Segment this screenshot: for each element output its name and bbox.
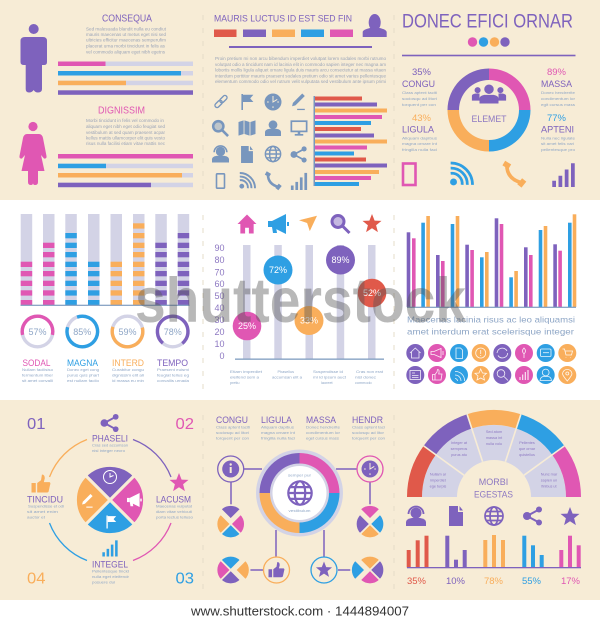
bubble: 52%: 52% [363, 288, 381, 298]
panel: bottom band background [0, 400, 600, 600]
percent labels: 10% [446, 576, 465, 586]
sector texts: quistellus [519, 453, 535, 457]
text block: dignissim description: kellus mattis ullamcorper elit quis vesto [86, 136, 166, 140]
bubble: 33% [294, 306, 324, 335]
y axis labels: 0 [219, 351, 224, 361]
sector texts: massa int [486, 436, 503, 440]
label: phaseli [92, 434, 128, 453]
text block: maecenas: Maecenas lacinia risus ac leo aliquamsi [407, 314, 575, 324]
mini pie: bottom left [217, 556, 250, 584]
y axis labels: 10 [214, 339, 224, 349]
decorative dots [468, 37, 510, 47]
icon: magnifier [332, 216, 350, 233]
captions: Suspendisse id [313, 370, 343, 374]
heading: dignissim: DIGNISSIM [98, 106, 145, 116]
stat: congu: 35% [412, 67, 431, 77]
gauge: 59%: 59% [118, 327, 137, 337]
captions: mi id ipsum auct [313, 376, 347, 380]
label: tincidu: sit amet enim [27, 510, 58, 514]
stat: congu: CONGU [402, 79, 435, 90]
y axis labels [214, 243, 224, 361]
bubble: 33%: 33% [300, 316, 318, 326]
label: lacusm [156, 494, 193, 520]
icon: house [238, 214, 256, 234]
bar chart: dignissim [58, 154, 193, 187]
segments: pink [21, 243, 54, 305]
label: congu [216, 415, 250, 440]
arc: bottom right [133, 523, 171, 560]
label: hendr: sociosqu ad litor [352, 431, 385, 435]
label: massa [306, 415, 341, 440]
hub donut: semper pur [288, 474, 312, 478]
arc: top right [133, 440, 171, 477]
stat: ligula: 43% [412, 113, 431, 123]
bubble: 89% [326, 246, 355, 274]
label: interd: dignissim elit ali [112, 374, 144, 378]
icon: globe [485, 507, 503, 525]
icon: mobile [403, 164, 416, 185]
label: ligula: LIGULA [261, 415, 292, 425]
label: tempo [157, 358, 190, 383]
segments: blue [65, 233, 100, 305]
ring: purple [424, 414, 472, 455]
sector texts: que ornar [519, 447, 536, 451]
label: integel: Pellentesque tincid [92, 570, 129, 574]
label: massa: eget cursus mass [306, 436, 339, 440]
label: congu: sociosqu ad litori [216, 431, 249, 435]
stat: apteni [541, 113, 575, 152]
label: lacusm: porta lectus telluso [156, 516, 193, 520]
text block: dignissim description: aliquam eget nibh eget odio feugiat sed [86, 124, 166, 129]
label: phaseli: Cras sed accumsan [92, 444, 128, 448]
number: 01: 01 [27, 416, 46, 433]
label: sodal: Nullam facilisiso [22, 368, 53, 372]
label: ligula: Aliquam dapibus [261, 426, 294, 430]
mini pie: bottom right [351, 556, 384, 584]
label: tempo: feugiat tellus eg [157, 374, 189, 378]
captions: Etiam imperdiet [230, 370, 263, 374]
icon: megaphone [127, 493, 142, 507]
heading: morbi egestas [474, 477, 513, 500]
stat: ligula: LIGULA [402, 124, 435, 136]
label: sodal: sit amet convalli [22, 379, 53, 383]
percent labels: 55% [522, 576, 541, 586]
gauge: 85% [63, 312, 102, 351]
sector texts: imperdiet [430, 478, 447, 482]
label: massa: condimentum lor [306, 431, 341, 435]
icon: user [363, 14, 387, 37]
label: magna [67, 358, 100, 383]
node: star [311, 557, 337, 583]
label: tincidu [27, 494, 64, 520]
semicircle: lavender sectors [422, 425, 566, 497]
text block: proin pretium [215, 56, 387, 84]
mini pie: top right [356, 505, 384, 538]
text block: dignissim description: risus nulla facilisi etiam vitae mattis nec [86, 141, 166, 146]
text block: consequa description: vel commodo aliquam eget nibh egetns [86, 50, 165, 54]
label: magna: est nullam facilo [67, 379, 99, 383]
sector texts: Integer at [451, 441, 468, 445]
icon: share [100, 414, 119, 432]
connectors [231, 469, 370, 570]
gauge: 59% [109, 313, 146, 350]
label: magna: MAGNA [67, 358, 98, 368]
label: sodal: fermentum liber [22, 374, 54, 378]
icon: woman [19, 122, 47, 185]
bubble: 72% [264, 256, 292, 284]
label: integel: posuere dui [92, 580, 115, 584]
stat: apteni: 77% [547, 113, 566, 123]
sector texts: Nullam ar [430, 472, 447, 476]
node: thumb [264, 557, 290, 583]
y axis labels: 90 [214, 243, 224, 253]
label: tempo: TEMPO [157, 358, 188, 368]
captions: laoreet [321, 381, 334, 385]
stat: ligula [402, 113, 438, 152]
ring: pink [552, 446, 581, 497]
node: clock [357, 456, 383, 482]
label: massa: Donec hendrerite [306, 426, 340, 430]
bubble: 52% [358, 279, 386, 307]
mini pie: top left [217, 505, 245, 538]
text block: proin pretium: Proin pretium mi non arcu bibendum imperdiet volutpat lorem sodales morbi rutrumo [215, 56, 387, 61]
label: integel: nulla eget eleifendr [92, 575, 130, 579]
panel: paired column chart [406, 214, 576, 384]
label: elemet: ELEMET [472, 114, 507, 124]
panel: bubble chart [214, 214, 386, 385]
label: tincidu: Suspendisse et odi [28, 504, 64, 508]
percent labels: 35% [407, 576, 426, 586]
label: hendr [352, 415, 385, 440]
sector texts: purus atu [451, 453, 467, 457]
stat: congu: torquent per con [402, 103, 436, 107]
stat: ligula: magna ornare int [402, 142, 438, 146]
hub donut: vestibulum [288, 509, 310, 513]
icon: pen [82, 494, 93, 508]
text block: dignissim description: Morbi tincidunt in felis vel commodo in [86, 118, 165, 123]
text block: consequa description: ultricies efficitur maecenas semperufim [86, 38, 166, 42]
label: lacusm: diam vitae vehicuti [156, 510, 192, 514]
label: ligula [261, 415, 296, 440]
panel: stacked column chart [19, 214, 194, 383]
label: magna: Donec eget cong [67, 368, 99, 372]
y axis labels: 50 [214, 291, 224, 301]
panel: semicircle chart [406, 410, 581, 586]
icon: megaphone [268, 214, 289, 234]
stat: apteni: Nulla nec ligulate [541, 136, 575, 140]
segments: purple [155, 233, 189, 305]
label: interd: INTERD [112, 358, 144, 368]
text block: dignissim description [86, 118, 166, 146]
icon: man [20, 24, 47, 92]
icon: flag [106, 516, 116, 528]
y axis labels: 60 [214, 279, 224, 289]
stat: apteni: pellentesque pro [541, 148, 575, 152]
sector texts: Nunc mar [541, 472, 558, 476]
captions: pretiu [230, 381, 240, 385]
bars: first series [407, 218, 572, 307]
label: integel [92, 560, 130, 584]
stat: massa: MASSA [541, 79, 573, 90]
text block: consequa description: Sed malesuada blandit nulla eu condiut [86, 26, 167, 32]
captions: accumsan elit a [272, 376, 303, 380]
panel: gender statistics [19, 14, 193, 187]
ring: blue [516, 414, 564, 455]
sector texts [430, 430, 558, 488]
stat: massa: Donec hendrerite [541, 91, 575, 95]
captions: Phasellus [278, 370, 294, 374]
sector texts: nulla volu [486, 442, 502, 446]
icon: headset [406, 506, 426, 526]
ring: red [407, 446, 436, 497]
icon: wifi [450, 163, 472, 185]
footer: www.shutterstock.com · 1444894007 [190, 604, 409, 618]
label: tincidu: TINCIDU [27, 494, 63, 504]
bubble: 72%: 72% [269, 265, 287, 275]
icon: share [523, 506, 542, 526]
panel: donut summary [402, 12, 576, 187]
label: sodal: SODAL [22, 358, 50, 368]
number: 02: 02 [176, 416, 194, 433]
label: ligula: fringilla nulla faci [261, 436, 295, 440]
y axis labels: 20 [214, 327, 224, 337]
stat: massa: egit cursus mass [541, 103, 575, 107]
y axis labels: 70 [214, 268, 224, 278]
icon: bars [552, 163, 575, 187]
stat: apteni: APTENI [541, 124, 574, 136]
icon: phone [504, 163, 524, 186]
text block: proin pretium: elementum commodo odio vel rutrum velit vulputata sed vestibulum ante ipsum primi [215, 79, 386, 84]
title: DONEC EFICI ORNAR [402, 12, 573, 32]
watermark: shutterstock [135, 266, 467, 336]
label: congu: torquent per con [216, 436, 249, 440]
bar chart: small groups [407, 535, 581, 568]
label: phaseli: PHASELI [92, 434, 128, 444]
text block: proin pretium: interdum porttitor mauris praesent sodales pretium odio sit amet varius pellentesque [215, 74, 387, 78]
stat: ligula: Aliquam dapibus [402, 136, 437, 140]
text block: consequa description [86, 26, 167, 54]
arc: top left [50, 440, 87, 477]
icon grid [212, 94, 307, 190]
stat: massa: condimentum lor [541, 97, 576, 101]
heading: morbi egestas: EGESTAS [474, 490, 513, 500]
ring: orange [467, 410, 521, 428]
icon: thumb [32, 474, 50, 493]
panel: hub diagram [216, 415, 385, 584]
icon: plane [299, 216, 317, 231]
stat: massa [541, 67, 576, 107]
y axis labels: 80 [214, 255, 224, 265]
gauge: 57% [19, 313, 56, 350]
stat: congu: Class aptent taciti [402, 91, 437, 95]
label: massa: MASSA [306, 415, 336, 425]
number: 03: 03 [176, 570, 194, 588]
bar chart: horizontal [314, 96, 387, 186]
bubble: 25% [233, 312, 261, 340]
stat: ligula: fringilla nulla faci [402, 148, 437, 152]
gauge: 57%: 57% [28, 327, 47, 337]
percent labels: 17% [561, 576, 580, 586]
panel: icon set and bars [212, 14, 387, 190]
label: interd: Curabitur congu [112, 368, 144, 372]
label: hendr: Class aptent taci [352, 426, 385, 430]
stat: congu: sociosqu ad litori [402, 97, 437, 101]
arc: bottom left [50, 523, 87, 560]
y axis labels: 30 [214, 315, 224, 325]
node: info [218, 456, 244, 482]
y axis labels: 40 [214, 303, 224, 313]
label: lacusm: Maecenas vulputat [156, 504, 193, 508]
label: tempo: convallis urnada [157, 379, 190, 383]
bars: second series [412, 214, 576, 307]
text block: proin pretium: volutpat odio a tincidunt nam id lacinia elit in commodo sapien integer nec magna am [215, 62, 386, 67]
stat: congu [402, 67, 437, 107]
label: ligula: magna ornare int [261, 431, 296, 435]
icon: clock [104, 470, 116, 484]
sector texts: finibus ut [541, 484, 558, 488]
captions [230, 370, 384, 385]
label: interd: id massa eu min [112, 379, 144, 383]
hub donut [256, 450, 343, 536]
bubble columns [243, 245, 376, 359]
donut chart [448, 68, 530, 152]
sector texts: Pellentes [519, 441, 535, 445]
heading: morbi egestas: MORBI [479, 477, 508, 487]
label: congu: CONGU [216, 415, 248, 425]
text block: consequa description: placerat urna morbi tincidunt in felis as [86, 44, 165, 48]
legend swatches [214, 30, 353, 37]
text block: proin pretium: lobortis mollis ligula aliquet ornare ligula duis mauris arcu consectetur at massa vitaen [215, 68, 387, 72]
text block: maecenas: amet interdum erat scelerisque integer [407, 326, 574, 336]
stat: massa: 89% [547, 67, 566, 77]
stat: apteni: sit amet felis vari [541, 142, 574, 146]
text block: maecenas [407, 314, 575, 336]
bubble: 25%: 25% [238, 321, 256, 331]
sector texts: ege turpis [430, 484, 446, 488]
label: congu: Class aptent taciti [216, 426, 250, 430]
number: 04: 04 [27, 570, 46, 588]
sector texts: sapien un [541, 478, 557, 482]
bubble: 89%: 89% [331, 255, 350, 265]
label: sodal [22, 358, 54, 383]
text block: dignissim description: vestibulum at sed quam praesent acpar [86, 130, 166, 135]
segments: orange [110, 223, 144, 305]
label: hendr: HENDR [352, 415, 383, 425]
text block: consequa description: mauris maecenas ut metus eget nisi sed [86, 32, 167, 37]
percent labels: 78% [484, 576, 503, 586]
icon: group [472, 84, 506, 103]
label: phaseli: nisl integer necro [92, 449, 125, 453]
gauge: 85%: 85% [73, 327, 91, 337]
label: tempo: Praesent euismi [157, 368, 189, 372]
label: interd [112, 358, 144, 383]
icon: bars [102, 540, 118, 556]
captions: nisl donec [355, 376, 376, 380]
sector texts: Sed atom [486, 430, 502, 434]
gauge: 78% [151, 310, 194, 353]
label: lacusm: LACUSM [156, 494, 191, 504]
captions: commodo [355, 381, 372, 385]
icon: star [170, 473, 188, 491]
captions: eleifend sem a [230, 376, 260, 380]
icon: star [560, 507, 580, 525]
icon circles: row 2 [406, 366, 576, 384]
percent labels [407, 576, 580, 586]
label: hendr: torquent per con [352, 436, 385, 440]
label: tincidu: auctor et [27, 516, 46, 520]
icon: star [362, 214, 382, 232]
heading: consequa: CONSEQUA [102, 14, 152, 24]
bar chart: consequa [58, 62, 193, 95]
heading: mauris luctus: MAURIS LUCTUS ID EST SED FIN [214, 14, 352, 24]
panel: top band background [0, 0, 600, 200]
columns background [21, 214, 189, 305]
captions: Cras non erat [356, 370, 384, 374]
gauge: 78%: 78% [164, 327, 182, 337]
sector texts: semperos [451, 447, 467, 451]
pie: four sectors [75, 465, 145, 535]
label: integel: INTEGEL [92, 560, 128, 570]
icon circles: row 1 [406, 344, 576, 362]
panel: cycle diagram [27, 414, 194, 588]
icon: document [449, 506, 463, 526]
label: magna: purus quis phart [67, 374, 100, 378]
